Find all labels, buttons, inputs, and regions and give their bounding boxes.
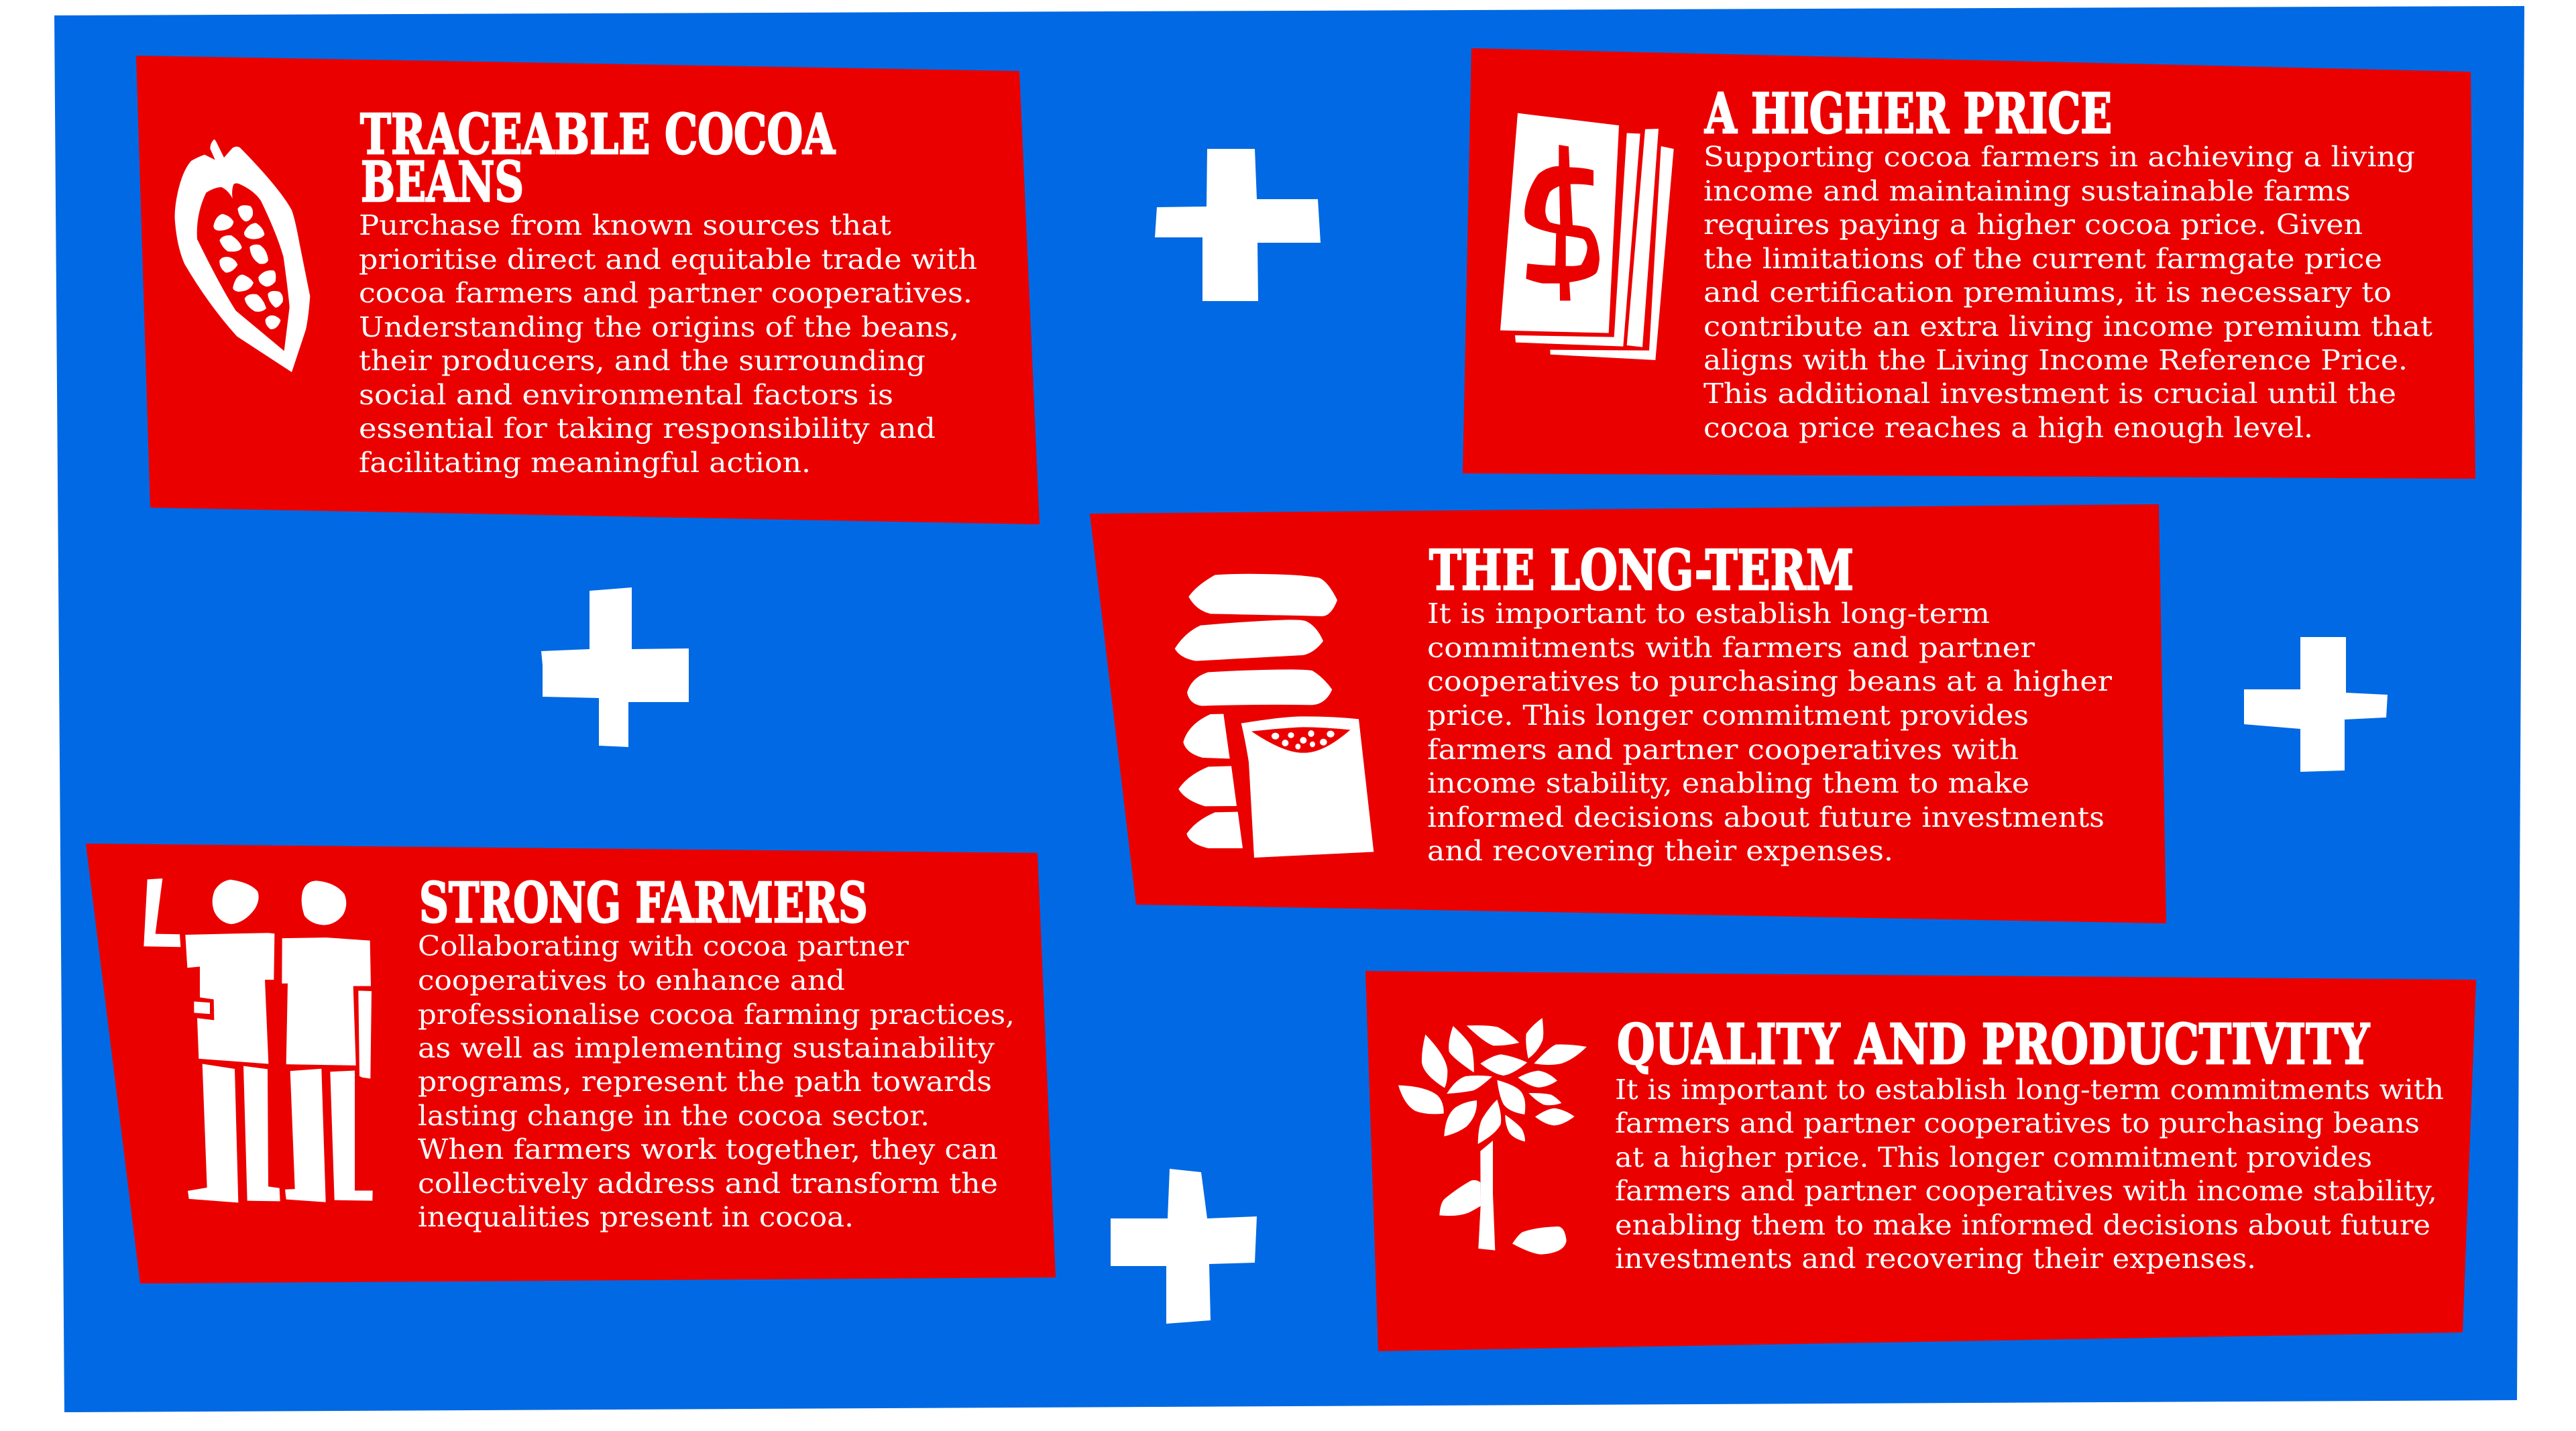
heading: strong farmers: STRONG FARMERS bbox=[419, 871, 868, 935]
icon: stack of banknotes bbox=[1500, 113, 1674, 360]
body text: strong farmers: inequalities present in cocoa. bbox=[418, 1201, 854, 1233]
body text: a higher price: requires paying a higher cocoa price. Given bbox=[1703, 209, 2363, 241]
icon: cocoa pod bbox=[175, 139, 310, 372]
body text: traceable cocoa beans: Understanding the origins of the beans, bbox=[359, 311, 959, 343]
body text: traceable cocoa beans: cocoa farmers and partner cooperatives. bbox=[359, 277, 972, 309]
body text: a higher price: aligns with the Living Income Reference Price. bbox=[1703, 344, 2408, 376]
body text: strong farmers: Collaborating with cocoa partner bbox=[418, 930, 909, 962]
body text: traceable cocoa beans: facilitating meaningful action. bbox=[359, 447, 811, 479]
body text: traceable cocoa beans: their producers, and the surrounding bbox=[359, 345, 926, 377]
body text: strong farmers: lasting change in the cocoa sector. bbox=[418, 1100, 930, 1132]
body text: the long-term: commitments with farmers and partner bbox=[1427, 632, 2035, 664]
body text: strong farmers: professionalise cocoa farming practices, bbox=[418, 998, 1015, 1031]
body text: strong farmers: as well as implementing sustainability bbox=[418, 1032, 995, 1064]
panel background bbox=[1090, 504, 2166, 923]
icon: two farmers bbox=[144, 878, 373, 1202]
plus sign: bottom centre bbox=[1111, 1169, 1257, 1324]
heading: traceable cocoa beans bbox=[360, 103, 836, 215]
body text: strong farmers: When farmers work together, they can bbox=[418, 1133, 998, 1165]
body text: traceable cocoa beans bbox=[359, 209, 977, 479]
body text: the long-term: farmers and partner cooperatives with bbox=[1427, 734, 2019, 766]
heading: traceable cocoa beans: BEANS bbox=[361, 150, 524, 215]
body text: the long-term: and recovering their expenses. bbox=[1427, 835, 1893, 867]
icon: stacked cocoa beans and bag bbox=[1175, 574, 1374, 858]
body text: strong farmers: programs, represent the path towards bbox=[418, 1066, 992, 1098]
heading: traceable cocoa beans: TRACEABLE COCOA bbox=[360, 103, 836, 167]
body text: quality and productivity: It is important to establish long-term commitments with bbox=[1615, 1074, 2444, 1106]
heading: the long-term: THE LONG-TERM bbox=[1429, 538, 1854, 603]
body text: traceable cocoa beans: Purchase from known sources that bbox=[359, 209, 892, 241]
plus sign: right bbox=[2244, 637, 2388, 772]
body text: traceable cocoa beans: social and environmental factors is bbox=[359, 379, 893, 411]
body text: the long-term: price. This longer commitment provides bbox=[1427, 699, 2029, 732]
panel background bbox=[1463, 48, 2475, 479]
body text: the long-term: income stability, enabling them to make bbox=[1427, 767, 2029, 799]
body text: traceable cocoa beans: essential for taking responsibility and bbox=[359, 412, 936, 445]
body text: the long-term: It is important to establish long-term bbox=[1427, 597, 1990, 630]
plus sign: top centre bbox=[1155, 149, 1321, 301]
body text: traceable cocoa beans: prioritise direct and equitable trade with bbox=[359, 243, 977, 276]
panel: quality and productivity bbox=[1365, 971, 2476, 1351]
body text: a higher price: income and maintaining sustainable farms bbox=[1703, 175, 2351, 207]
body text: quality and productivity: investments and recovering their expenses. bbox=[1615, 1243, 2256, 1275]
body text: quality and productivity: farmers and partner cooperatives to purchasing beans bbox=[1615, 1107, 2420, 1139]
panel background bbox=[136, 56, 1040, 524]
body text: the long-term: cooperatives to purchasing beans at a higher bbox=[1427, 665, 2112, 697]
body text: a higher price: contribute an extra living income premium that bbox=[1703, 310, 2433, 343]
panel background bbox=[86, 844, 1056, 1283]
body text: the long-term bbox=[1427, 597, 2112, 867]
icon: cocoa tree bbox=[1398, 1018, 1587, 1255]
body text: a higher price: and certification premiums, it is necessary to bbox=[1703, 276, 2392, 308]
body text: strong farmers: cooperatives to enhance and bbox=[418, 964, 845, 996]
panel: a higher price bbox=[1463, 48, 2475, 479]
heading: quality and productivity: QUALITY AND PRODUCTIVITY bbox=[1617, 1013, 2370, 1077]
plus sign: left bbox=[541, 587, 689, 747]
body text: a higher price bbox=[1703, 141, 2433, 444]
body text: the long-term: informed decisions about future investments bbox=[1427, 801, 2105, 834]
panel: traceable cocoa beans bbox=[136, 56, 1040, 524]
body text: a higher price: Supporting cocoa farmers in achieving a living bbox=[1703, 141, 2415, 173]
body text: quality and productivity: enabling them to make informed decisions about future bbox=[1615, 1209, 2430, 1241]
body text: a higher price: the limitations of the current farmgate price bbox=[1703, 243, 2382, 275]
body text: a higher price: cocoa price reaches a high enough level. bbox=[1703, 412, 2313, 444]
body text: quality and productivity bbox=[1615, 1074, 2444, 1275]
body text: strong farmers bbox=[418, 930, 1015, 1233]
panel background bbox=[1365, 971, 2476, 1351]
body text: a higher price: This additional investment is crucial until the bbox=[1703, 378, 2396, 410]
panel: strong farmers bbox=[86, 844, 1056, 1283]
heading: a higher price: A HIGHER PRICE bbox=[1704, 82, 2112, 146]
body text: strong farmers: collectively address and transform the bbox=[418, 1167, 998, 1200]
body text: quality and productivity: farmers and partner cooperatives with income stability, bbox=[1615, 1175, 2437, 1207]
body text: quality and productivity: at a higher price. This longer commitment provides bbox=[1615, 1141, 2372, 1174]
panel: the long-term bbox=[1090, 504, 2166, 923]
